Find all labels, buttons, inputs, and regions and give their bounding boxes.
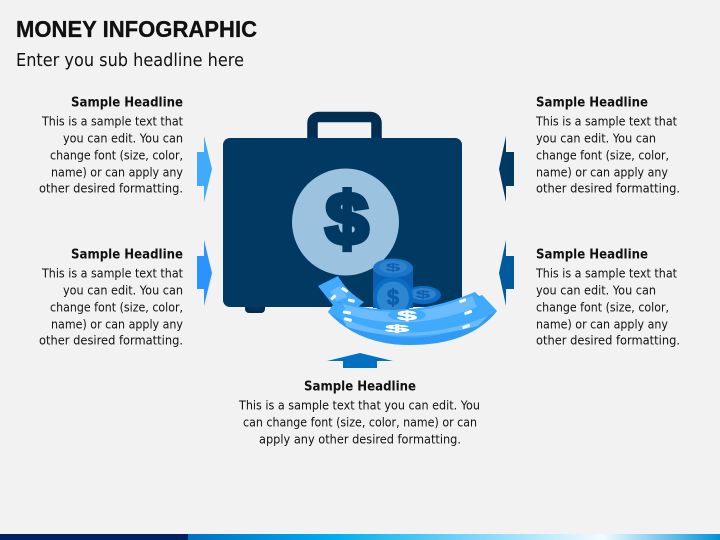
icon: money and coins <box>318 258 497 345</box>
text block: middle left: Sample Headline <box>71 248 183 262</box>
arrow: middle right <box>499 240 514 306</box>
arrow: top right <box>499 136 514 202</box>
text block: middle left: name) or can apply any <box>51 318 183 332</box>
text block: middle left: change font (size, color, <box>50 300 183 314</box>
text block: bottom centre: Sample Headline <box>304 380 416 394</box>
arrow: bottom <box>327 353 393 368</box>
dollar sign: $ <box>326 178 368 260</box>
text block: top right: you can edit. You can <box>536 132 656 146</box>
text block: middle right <box>535 248 680 348</box>
text block: top left: name) or can apply any <box>51 166 183 180</box>
text block: middle right: change font (size, color, <box>536 300 669 314</box>
text block: middle right: you can edit. You can <box>536 284 656 298</box>
text block: top left: other desired formatting. <box>39 182 183 196</box>
text block: top left: Sample Headline <box>71 96 183 110</box>
footer bar: dark segment <box>0 534 188 540</box>
text block: middle right: other desired formatting. <box>536 334 680 348</box>
coin stack: $ <box>416 289 430 301</box>
text block: middle right: This is a sample text that <box>535 266 677 280</box>
text block: bottom centre: This is a sample text that you can edit. You <box>238 398 480 412</box>
coin stack: $ <box>387 285 399 310</box>
bill dollar marks: $ <box>385 324 411 335</box>
back bill <box>318 276 364 318</box>
text block: top left: change font (size, color, <box>50 148 183 162</box>
text block: bottom centre: apply any other desired formatting. <box>259 432 461 446</box>
text block: top right <box>535 96 680 196</box>
briefcase body <box>223 138 462 307</box>
bill dollar marks: $ <box>397 308 419 323</box>
back bill panel <box>330 286 347 301</box>
text block: middle left: other desired formatting. <box>39 334 183 348</box>
text block: top left: you can edit. You can <box>63 132 183 146</box>
briefcase handle <box>312 117 376 140</box>
title: MONEY INFOGRAPHIC <box>16 16 257 42</box>
text block: middle right: name) or can apply any <box>536 318 668 332</box>
arrow: middle left <box>197 240 212 306</box>
text block: middle left: This is a sample text that <box>41 266 183 280</box>
coin stack <box>373 258 441 317</box>
briefcase foot <box>245 302 265 313</box>
bills <box>328 292 497 345</box>
text block: middle left: you can edit. You can <box>63 284 183 298</box>
text block: middle left <box>39 248 183 348</box>
text block: top right: Sample Headline <box>536 96 648 110</box>
icon: briefcase <box>223 117 462 313</box>
text block: top right: This is a sample text that <box>535 114 677 128</box>
coin circle <box>292 168 399 276</box>
text block: bottom centre: can change font (size, color, name) or can <box>243 416 477 430</box>
text block: top right: other desired formatting. <box>536 182 680 196</box>
text block: middle right: Sample Headline <box>536 248 648 262</box>
arrow: top left <box>197 136 212 202</box>
text block: bottom centre <box>238 380 480 446</box>
text block: top left: This is a sample text that <box>41 114 183 128</box>
text block: top right: change font (size, color, <box>536 148 669 162</box>
bill dollar marks <box>330 287 472 335</box>
text block: top right: name) or can apply any <box>536 166 668 180</box>
coin stack: $ <box>386 262 400 274</box>
footer bar: gradient segment <box>188 534 720 540</box>
text block: top left <box>39 96 183 196</box>
subtitle: Enter you sub headline here <box>16 51 244 71</box>
